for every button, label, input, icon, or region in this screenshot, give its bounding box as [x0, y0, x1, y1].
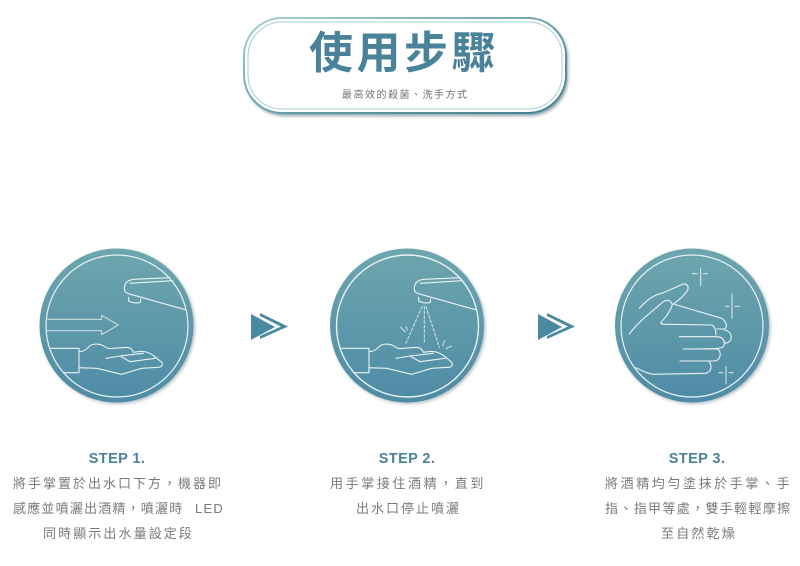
icon: faucet	[414, 278, 475, 310]
title: 使用步驟	[309, 29, 499, 78]
step 1 description	[13, 476, 224, 541]
step 3 heading: STEP 3.	[669, 451, 725, 467]
icon: sparks	[401, 327, 451, 349]
arrow 2	[538, 313, 575, 340]
step 2 description: 出水口停止噴灑	[356, 501, 461, 516]
step 3 description: 指、指甲等處，雙手輕輕摩擦	[605, 501, 792, 516]
icon: hand	[51, 344, 162, 374]
step 1 description: 同時顯示出水量設定段	[43, 526, 194, 541]
arrow 1	[251, 313, 288, 340]
icon: rubbing hands	[629, 284, 731, 374]
step 1 text	[13, 451, 224, 541]
step 3 description	[605, 476, 792, 541]
step 1 description: 將手掌置於出水口下方，機器即	[13, 476, 223, 491]
icon: sparkles	[692, 268, 740, 384]
step 1 heading: STEP 1.	[89, 451, 145, 467]
subtitle: 最高效的殺菌、洗手方式	[342, 90, 468, 101]
step 3 text	[605, 451, 792, 541]
step 3 description: 至自然乾燥	[661, 526, 737, 541]
step 2 description: 用手掌接住酒精，直到	[330, 476, 486, 491]
step 2 heading: STEP 2.	[379, 451, 435, 467]
step 3 circle icon	[615, 248, 770, 404]
step 3 description: 將酒精均勻塗抹於手掌、手	[605, 476, 792, 491]
step 1 description: 感應並噴灑出酒精，噴灑時 LED	[13, 501, 224, 516]
step 2 text	[330, 451, 486, 516]
icon: arrow	[47, 315, 118, 335]
icon: hand	[341, 344, 452, 374]
title panel	[244, 18, 568, 116]
icon: faucet	[124, 278, 185, 310]
step 2 description	[330, 476, 486, 516]
step 1 circle icon	[40, 248, 195, 404]
icon: spray	[406, 307, 439, 347]
step 2 circle icon	[330, 248, 486, 404]
